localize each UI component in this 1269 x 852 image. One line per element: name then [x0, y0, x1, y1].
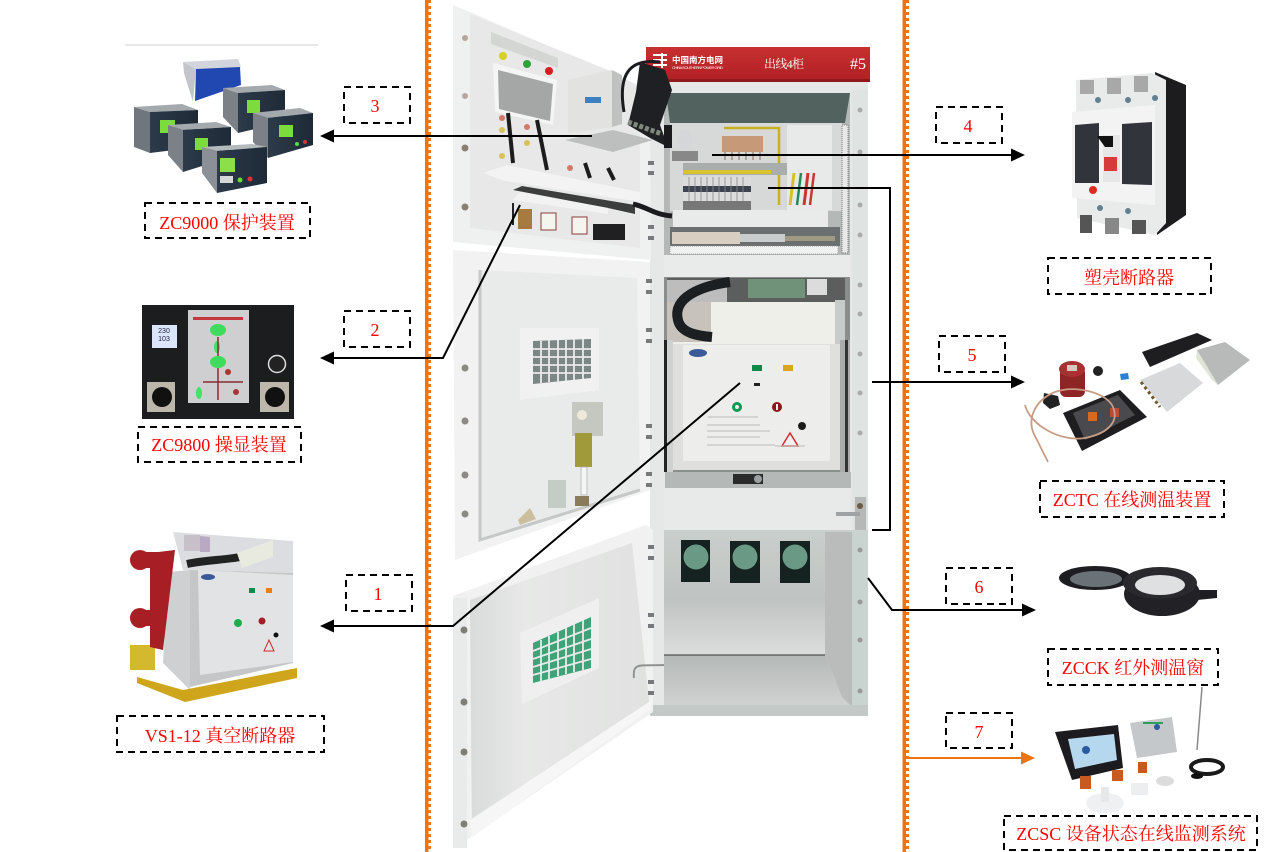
- product: moulded case circuit breaker: [1072, 72, 1186, 235]
- number box 3: [344, 87, 410, 123]
- arrow 7: [909, 752, 1035, 764]
- lower cable compartment with infrared windows: [650, 530, 868, 716]
- arrow 3: [320, 130, 592, 142]
- number box 3: 3: [370, 96, 380, 116]
- number box 5: [939, 336, 1005, 372]
- number box 7: 7: [974, 722, 984, 742]
- product: ZC9000 protection devices: [125, 45, 318, 193]
- product: ZC9800 operation display: 103: [158, 336, 170, 343]
- top door: [453, 5, 672, 260]
- red nameplate header: #5: [850, 56, 866, 73]
- product: VS1-12 vacuum circuit breaker: [130, 532, 297, 702]
- number box 6: 6: [974, 577, 984, 597]
- product: ZC9800 operation display: 230: [158, 328, 170, 335]
- door hinges: [646, 161, 654, 695]
- product: ZC9800 operation display: [142, 305, 294, 419]
- label: ZC9000: [145, 203, 310, 238]
- label: ZCCK: ZCCK 红外测温窗: [1062, 658, 1204, 678]
- red nameplate header: 中国南方电网: [672, 55, 723, 65]
- label: ZCTC: ZCTC 在线测温装置: [1053, 490, 1211, 510]
- label: VS1-12: [117, 716, 324, 752]
- number box 4: [936, 107, 1002, 143]
- arrow 1: [320, 383, 740, 632]
- bottom door: [453, 525, 664, 848]
- arrow 4: [712, 148, 1025, 162]
- number box 4: 4: [964, 116, 972, 136]
- red nameplate header: CHINA SOUTHERN POWER GRID: [672, 65, 723, 70]
- number box 6: [946, 568, 1012, 604]
- red nameplate header: 出线4柜: [764, 56, 804, 71]
- arrow 6: [868, 578, 1036, 616]
- product: ZCSC condition monitoring system: [1055, 687, 1223, 813]
- label: moulded case breaker: [1048, 258, 1211, 294]
- arrow 2: [320, 205, 520, 364]
- cable bundle on top door: [622, 61, 672, 148]
- label: ZC9000: ZC9000 保护装置: [159, 213, 295, 233]
- label: VS1-12: VS1-12 真空断路器: [145, 726, 295, 746]
- arrow 5 with bracket: [768, 188, 1025, 530]
- left orange divider: [425, 0, 430, 852]
- red nameplate header: [646, 47, 870, 82]
- middle breaker compartment: [664, 278, 851, 488]
- right orange divider: [902, 0, 908, 852]
- cabinet door latch: [836, 497, 866, 530]
- label: ZCTC: [1040, 481, 1224, 517]
- label: ZCSC: [1004, 816, 1257, 850]
- number box 1: [346, 575, 412, 611]
- product: ZCTC online temperature measurement: [1025, 333, 1250, 462]
- number box 2: [344, 311, 410, 347]
- switchgear cabinet photo: [453, 5, 870, 848]
- upper relay compartment: [666, 93, 850, 254]
- label: ZC9800: ZC9800 操显装置: [151, 435, 287, 455]
- number box 1: 1: [374, 584, 382, 604]
- number box 5: 5: [968, 345, 976, 365]
- cabinet body: [650, 82, 868, 716]
- label: moulded case breaker: 塑壳断路器: [1084, 268, 1174, 288]
- middle door: [453, 250, 650, 560]
- number box 7: [946, 713, 1012, 748]
- label: ZCSC: ZCSC 设备状态在线监测系统: [1016, 824, 1246, 844]
- product: ZCCK infrared window: [1059, 566, 1217, 616]
- number box 2: 2: [370, 320, 380, 340]
- label: ZCCK: [1048, 649, 1218, 685]
- label: ZC9800: [138, 427, 301, 462]
